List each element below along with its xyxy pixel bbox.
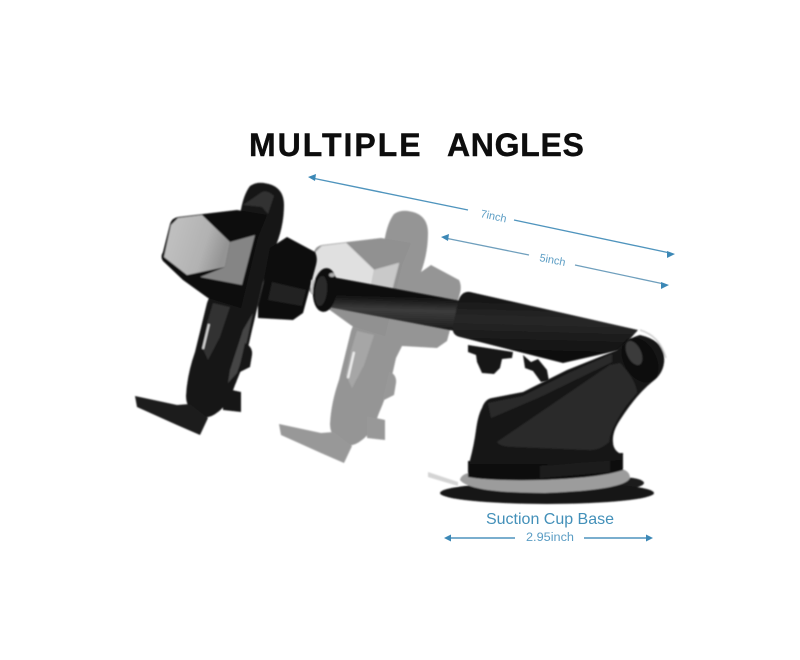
jaw darker facet — [200, 235, 255, 285]
upper ridge — [488, 354, 612, 418]
label: 7 inch: 7inch — [479, 208, 508, 225]
lower body — [202, 303, 230, 360]
suction tab — [428, 472, 458, 486]
textured panel — [497, 363, 637, 450]
joint ring — [311, 267, 339, 313]
side button — [238, 343, 252, 373]
arrow: 5 inch dimension — [441, 234, 669, 289]
upper jaw — [162, 210, 267, 308]
ghost jaw face — [308, 243, 374, 303]
suction cup — [440, 482, 654, 504]
outer sleeve — [453, 292, 638, 363]
back plate — [186, 183, 284, 417]
label: base width: 2.95inch — [526, 532, 574, 544]
label: 5 inch: 5inch — [538, 252, 567, 269]
back plate highlight — [243, 192, 274, 214]
phone holder: front position — [135, 183, 317, 435]
suction cup lip — [596, 477, 644, 489]
rear swivel knob — [258, 237, 317, 320]
rear tab — [223, 388, 241, 412]
grey ring — [460, 468, 630, 493]
arrow: 7 inch dimension — [308, 174, 675, 258]
collar — [468, 453, 623, 480]
ghost side button and tab — [367, 371, 396, 440]
lever clip — [523, 355, 549, 382]
telescopic arm and ball joint — [311, 267, 638, 382]
adjustment knob — [468, 345, 513, 374]
label: suction cup base: Suction Cup Base — [486, 511, 614, 528]
plate side strip — [228, 313, 253, 383]
pivot highlight — [640, 330, 666, 358]
lower jaw foot — [135, 396, 208, 435]
title: MULTIPLE — [249, 127, 423, 163]
title: ANGLES — [447, 127, 585, 163]
arrow: base width dimension — [444, 534, 653, 542]
light ball stem — [311, 280, 321, 294]
suction cup base assembly — [428, 330, 666, 504]
pivot cap — [614, 331, 666, 389]
ghost phone holder: extended position — [279, 211, 461, 463]
ghost lower body highlight — [346, 331, 374, 388]
base body — [470, 335, 664, 464]
collar highlight — [540, 460, 610, 478]
ghost lower jaw — [279, 424, 352, 463]
jaw grey face — [164, 215, 230, 275]
inner tube — [328, 277, 461, 331]
ghost upper jaw — [306, 238, 411, 336]
ghost back plate and knob silhouette — [330, 211, 461, 445]
